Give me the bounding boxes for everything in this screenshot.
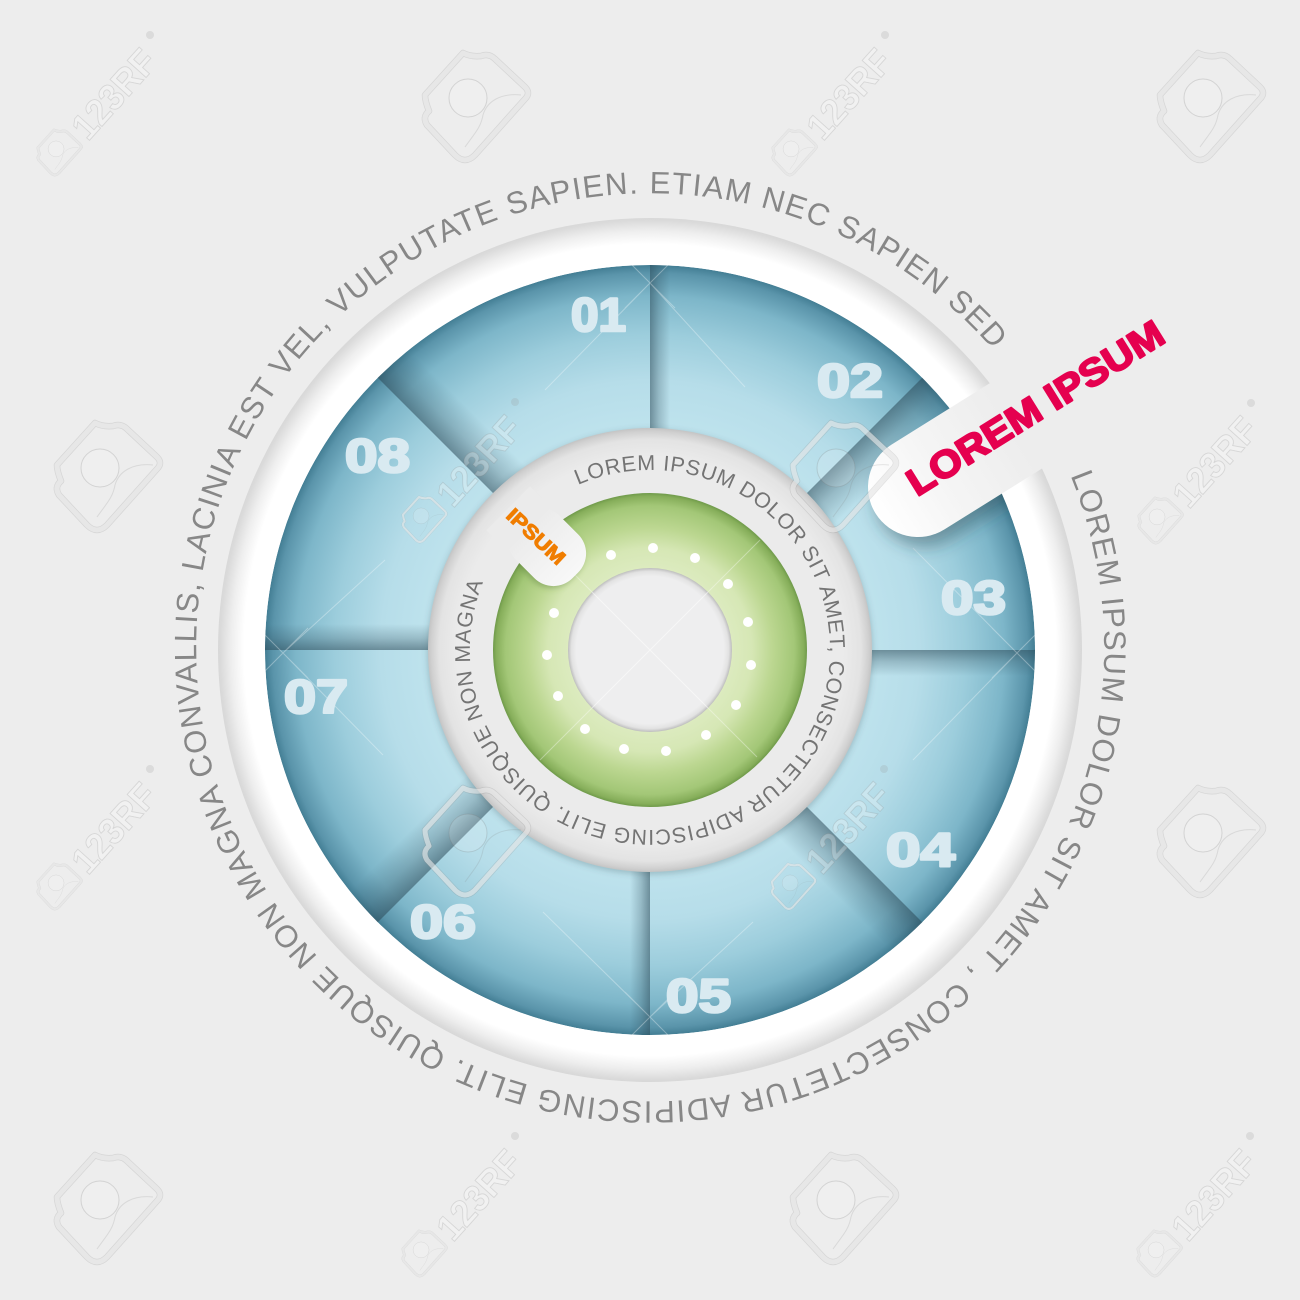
number 04: 04 — [886, 823, 955, 876]
number 03: 03 — [941, 571, 1006, 624]
green ring dots — [542, 543, 756, 756]
tab heading: LOREM IPSUM — [900, 313, 1172, 505]
outer curved text: LOREM IPSUM DOLOR SIT AMET , CONSECTETUR ADIPISCING ELIT. QUISQUE NON MAGNA CONVALLIS, LACINIA EST VEL, VULPUTATE SAPIEN. ETIAM NEC SAPIEN SED — [174, 172, 1126, 1123]
small tab: ipsum — [505, 507, 587, 590]
center hole — [568, 568, 732, 732]
green ring — [493, 493, 807, 807]
number 02: 02 — [817, 354, 883, 407]
number 08: 08 — [345, 429, 410, 482]
faint cross lines on green ring — [540, 540, 760, 760]
faint cross lines in center — [592, 592, 708, 708]
inner curved text: LOREM IPSUM DOLOR SIT AMET, CONSECTETUR ADIPISCING ELIT. QUISQUE NON MAGNA — [455, 455, 845, 845]
white outer ring — [218, 218, 1082, 1082]
number 06: 06 — [410, 895, 476, 948]
number 01: 01 — [571, 288, 626, 341]
number 07: 07 — [284, 670, 348, 723]
inner grey disc — [427, 428, 873, 875]
panel: blue wheel of eight segments — [265, 265, 1035, 1035]
segment numbers — [284, 288, 1006, 1022]
large tab: lorem ipsum — [849, 296, 1182, 556]
label: ipsum: IPSUM — [502, 505, 569, 570]
number 05: 05 — [666, 969, 731, 1022]
